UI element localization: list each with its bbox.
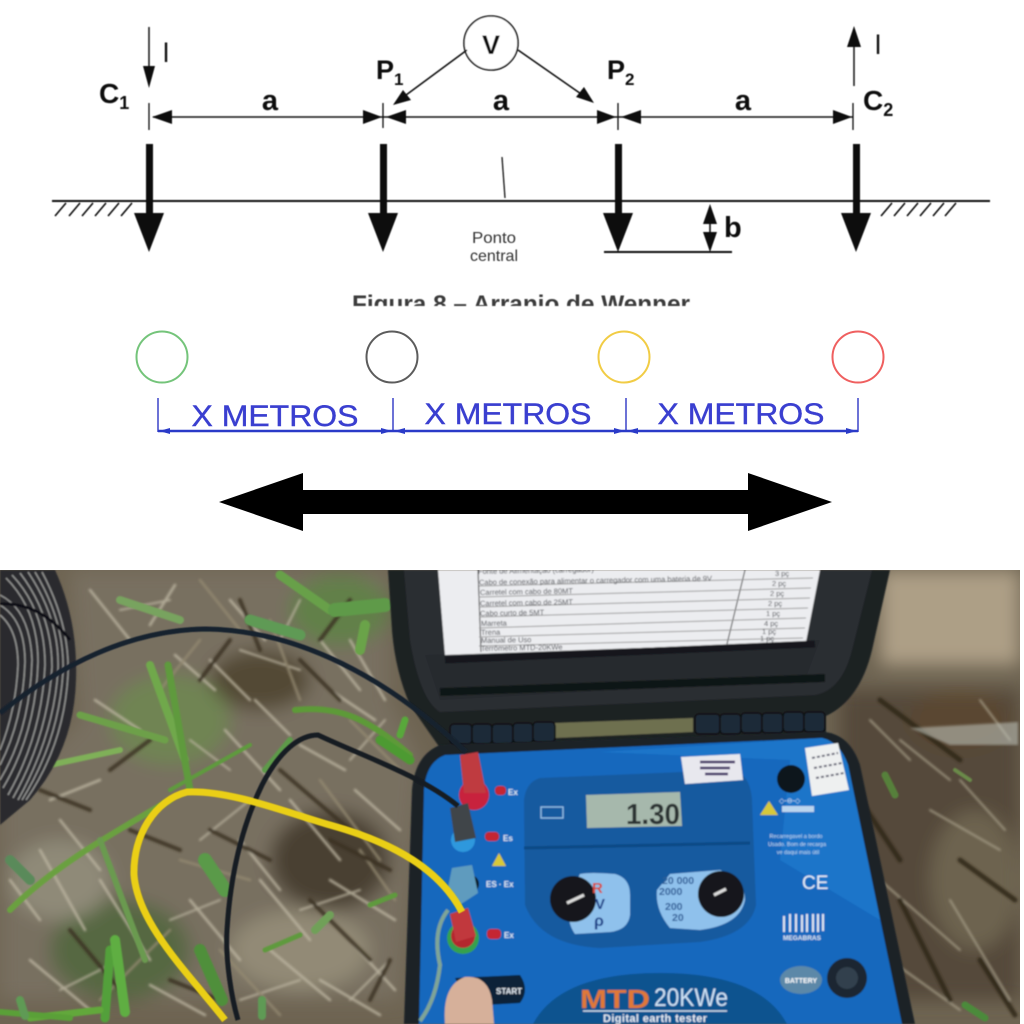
bottom brand plate: MTD (580, 984, 650, 1014)
document under lid window: Marreta (481, 619, 508, 628)
gray circle (366, 332, 418, 382)
bottom brand plate: 20KWe (654, 984, 728, 1012)
spacing dimension a: a (262, 85, 279, 117)
black test lead 1 (0, 629, 466, 752)
central point label: central (470, 248, 518, 265)
spacing dimension a (149, 85, 853, 130)
battery button: BATTERY (785, 978, 817, 985)
side labels: CE (802, 873, 828, 894)
current arrow and label at C1: l (163, 38, 169, 68)
right range dial: 200 (665, 901, 683, 913)
document under lid window: Trena (481, 628, 501, 637)
document under lid window: Manual de Uso (481, 635, 531, 645)
grey-green test lead (420, 910, 448, 1021)
start button with finger: START (496, 987, 522, 996)
hinges (450, 712, 825, 744)
instrument case lid (388, 565, 890, 748)
document under lid window: 2 pç (772, 579, 786, 588)
left selector dial: R (592, 880, 603, 897)
green grass blades (0, 575, 985, 1018)
side labels: ◇-⊖-◇ (779, 798, 801, 805)
terminal ES with blue connector (448, 865, 514, 906)
document under lid window (438, 565, 820, 655)
black test lead 2 (227, 735, 458, 1020)
diagram: Wenner array (52, 16, 990, 318)
charge socket (777, 765, 805, 793)
cable coil (0, 570, 76, 825)
side labels: Recarregavel a bordo (770, 834, 822, 840)
current arrow and label at C2: C (863, 85, 883, 116)
gap showing grass behind hinges (555, 718, 693, 738)
bottom brand plate (533, 973, 787, 1024)
terminal H (459, 752, 518, 810)
current arrow and label at C1: 1 (119, 93, 129, 113)
spacing: X metros: X METROS (192, 400, 358, 433)
terminal E (447, 908, 514, 954)
voltmeter with leads: V (482, 30, 500, 60)
spacing dimension a: a (493, 85, 510, 117)
document under lid window: 1 pç (766, 609, 780, 618)
electrode P2 (603, 144, 633, 252)
document under lid window: 2 pç (770, 589, 784, 598)
right range dial: 20 000 (662, 875, 694, 887)
terminal E: Ex (504, 931, 514, 940)
voltmeter with leads (393, 16, 594, 105)
P1 label: 1 (394, 70, 403, 89)
spacing: X metros: X METROS (658, 398, 824, 431)
left selector dial (550, 873, 630, 934)
double-headed black arrow (219, 473, 832, 531)
electrode C1 (134, 144, 164, 252)
document under lid window: 3 pç (775, 569, 789, 578)
electrode circles row (136, 332, 884, 382)
P2 label: 2 (625, 70, 634, 89)
terminal S: Es (503, 834, 513, 843)
right range dial: 20 (672, 912, 684, 924)
right range dial (657, 870, 745, 930)
depth dimension b (604, 204, 742, 252)
left selector dial: V (595, 896, 605, 913)
green circle (136, 332, 188, 382)
central point tick (502, 157, 505, 198)
dry straw (10, 580, 1015, 1015)
ground background (0, 570, 1020, 1024)
instrument body (404, 732, 915, 1024)
side labels (760, 798, 828, 942)
document under lid window: 2 pç (768, 599, 782, 608)
document under lid window: Fonte de Alimentação (carregador) (478, 565, 594, 576)
yellow test lead (134, 792, 462, 1020)
current arrow and label at C2 (847, 26, 893, 120)
side labels: Usado. Bom de recarga (768, 842, 827, 848)
current arrow and label at C2: 2 (883, 100, 893, 120)
left selector dial: ρ (594, 913, 604, 930)
battery icon (541, 807, 563, 818)
terminal ES with blue connector: ES · Ex (486, 880, 514, 889)
central point label (470, 230, 518, 265)
battery button (780, 958, 867, 998)
yellow circle (598, 332, 650, 382)
spacing: X metros: X METROS (424, 398, 592, 431)
depth dimension b: b (724, 212, 742, 244)
spacing: X metros (158, 398, 858, 434)
P1 label: P (376, 55, 394, 85)
photo: earth tester in the field (0, 565, 1020, 1024)
terminal H: Ex (508, 788, 518, 797)
ground line with hatching (52, 201, 990, 216)
stickers (681, 743, 849, 796)
terminal S (450, 803, 513, 866)
LCD display (586, 792, 682, 831)
document under lid window: Terrômetro MTD-20KWe (481, 643, 563, 653)
current arrow and label at C1 (99, 27, 169, 113)
control panel recess (524, 770, 756, 948)
bright soil patch (910, 722, 1018, 745)
document under lid window: Carretel com cabo de 25MT (480, 597, 573, 608)
current arrow and label at C1: C (99, 78, 119, 109)
document under lid window: 4 pç (764, 619, 778, 628)
start button with finger (445, 975, 525, 1024)
red circle (832, 332, 884, 382)
document under lid window: 1 pç (762, 627, 776, 636)
document under lid window: Cabo curto de 5MT (480, 608, 545, 618)
electrode P1 (368, 144, 398, 252)
current arrow and label at C2: l (875, 30, 881, 60)
LCD display: 1.30 (626, 799, 680, 831)
right range dial: 2000 (659, 886, 683, 898)
document under lid window: Carretel com cabo de 80MT (480, 586, 573, 597)
figure caption: Figura 8 – Arranjo de Wenner (352, 291, 690, 318)
document under lid window: Cabo de conexão para alimentar o carregador com uma bateria de 9V (479, 574, 712, 587)
side labels: MEGABRAS (783, 935, 822, 942)
document under lid window: 1 pç (760, 634, 774, 643)
central point label: Ponto (472, 230, 516, 247)
side labels: ve daqui mais útil (777, 850, 819, 856)
P2 label: P (607, 55, 625, 85)
electrode C2 (841, 144, 871, 252)
right white margin (1020, 570, 1024, 1024)
spacing dimension a: a (735, 85, 752, 117)
